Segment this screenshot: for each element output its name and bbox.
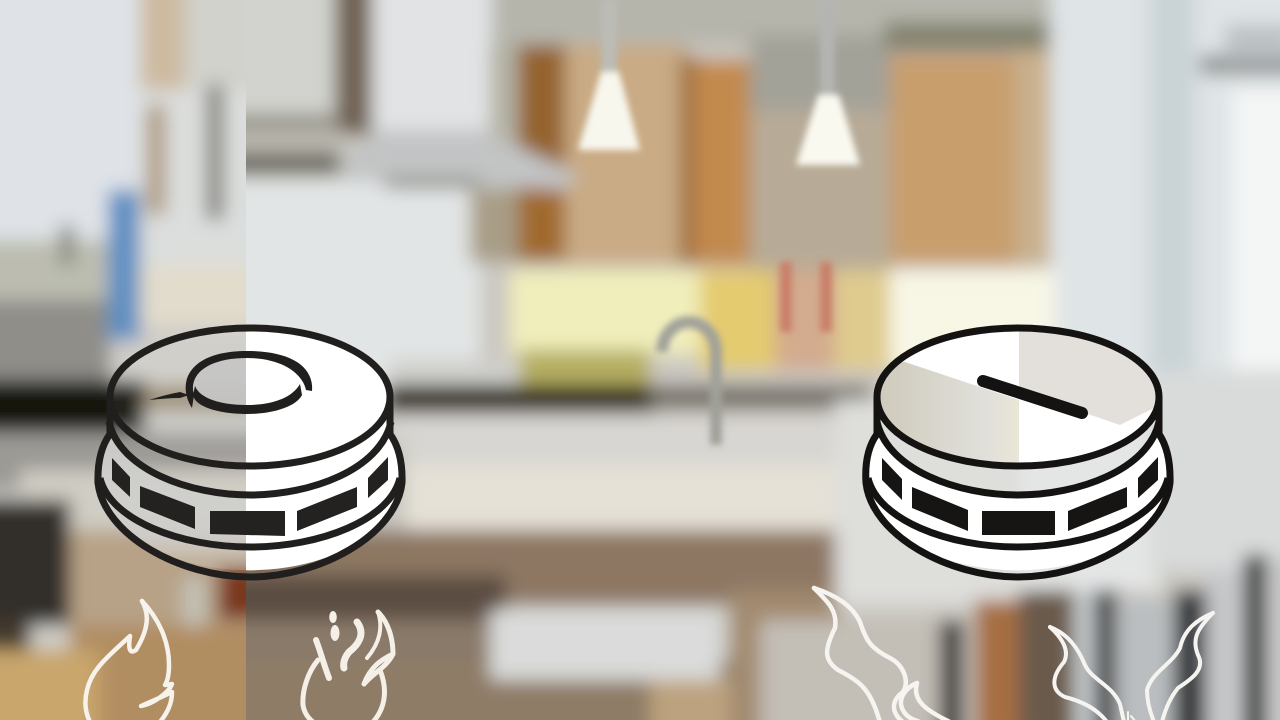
alarm outlines — [98, 328, 402, 577]
alarm body: solid white lower bands — [865, 425, 1170, 570]
icon: left smoke alarm with speaker — [97, 328, 402, 577]
vent slots — [112, 457, 388, 536]
alarm body: solid white right side — [246, 332, 398, 570]
icon: right smoke wisps — [1050, 613, 1213, 720]
icon: left flame — [85, 601, 172, 720]
vent slots — [882, 457, 1158, 535]
speaker ring and crescent — [149, 351, 312, 414]
icon: left smoke wisp — [814, 588, 950, 720]
alarm top face reflections — [880, 332, 1155, 462]
photo background: left panel of blurred kitchen — [0, 0, 246, 720]
icon: right smoke alarm with slit — [865, 300, 1170, 577]
alarm body: half-transparent left side — [102, 377, 246, 570]
alarm outlines — [866, 328, 1170, 577]
top slit — [983, 381, 1082, 413]
icon: right flame with droplets — [303, 611, 393, 720]
